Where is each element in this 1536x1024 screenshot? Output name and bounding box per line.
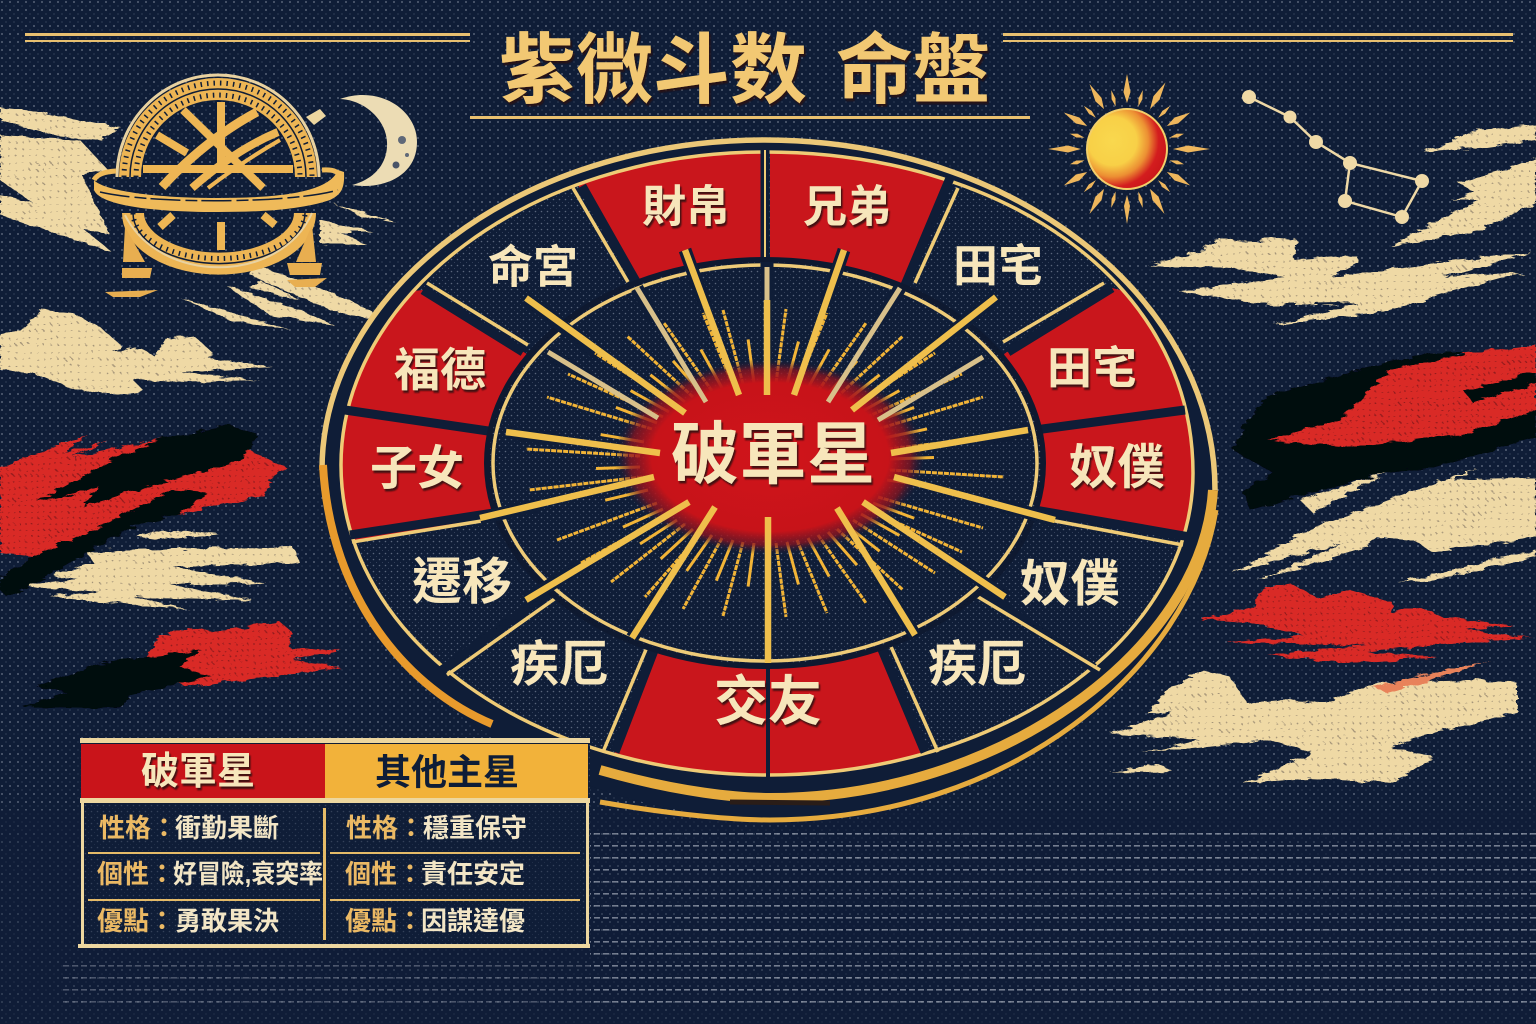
horizon ring <box>94 170 344 212</box>
label: 疾厄 right: 疾厄 <box>928 638 1026 692</box>
table header: 破軍星: 破軍星 <box>141 751 255 793</box>
palace: 兄弟 <box>770 154 944 283</box>
label: 遷移: 遷移 <box>412 554 512 610</box>
palace: 奴僕 <box>1040 414 1192 532</box>
label: 田宅 lower: 田宅 <box>1047 342 1137 394</box>
lower graduated arc <box>133 213 305 264</box>
palace: 福德 <box>350 290 526 426</box>
comparison table <box>78 738 590 948</box>
inner circle <box>489 262 1041 664</box>
wheel rim <box>323 465 1216 820</box>
cell dividers <box>345 148 1190 780</box>
right foot <box>287 225 327 287</box>
table rows: 破軍星 column: 衝勤果斷 <box>175 813 279 843</box>
wheel disc with outer ring <box>322 140 1215 818</box>
main burst rays <box>480 250 1055 663</box>
title: 紫微斗数 <box>499 28 807 114</box>
table rows: 其他主星 column: 責任安定 <box>421 859 525 889</box>
table rows: 其他主星 column: 個性： <box>345 859 423 889</box>
brush clouds: cream <box>0 108 1536 783</box>
upper graduated arc <box>130 89 306 177</box>
left foot <box>105 227 158 297</box>
table header: 破軍星 <box>81 744 325 798</box>
table rows: 破軍星 column: 勇敢果決 <box>175 906 279 936</box>
zodiac wheel <box>300 120 1216 820</box>
label: 奴僕 dark: 奴僕 <box>1020 556 1120 612</box>
title: 命盤 <box>836 28 990 114</box>
icon: big dipper constellation <box>1242 90 1429 224</box>
label: 破軍星 center: 破軍星 <box>671 417 875 493</box>
cell texture <box>341 152 1193 775</box>
table rows: 其他主星 column: 性格： <box>346 813 424 843</box>
label: 交友: 交友 <box>714 672 822 732</box>
table rows: 其他主星 column: 優點： <box>345 906 423 936</box>
cell outline <box>341 152 1193 775</box>
palace: 田宅 <box>1004 288 1183 425</box>
table rows: 其他主星 column <box>345 813 527 936</box>
table rows: 破軍星 column: 個性： <box>97 859 175 889</box>
label: 子女: 子女 <box>370 442 464 494</box>
label: 奴僕 red: 奴僕 <box>1069 442 1165 494</box>
table rows: 破軍星 column: 優點： <box>97 906 175 936</box>
red palaces <box>342 154 1192 774</box>
label: 田宅 upper: 田宅 <box>953 240 1043 292</box>
label: 兄弟: 兄弟 <box>803 182 891 232</box>
palace: 子女 <box>342 415 491 540</box>
icon: sun <box>1048 74 1210 224</box>
short burst rays <box>525 309 1005 617</box>
label: 疾厄 left: 疾厄 <box>510 638 608 692</box>
table rows: 破軍星 column: 好冒險,衰突率 <box>173 859 323 889</box>
central red glow <box>614 359 926 555</box>
label: 財帛: 財帛 <box>642 182 730 232</box>
icon: crescent moon <box>340 95 417 186</box>
brush strokes: red and black <box>0 345 1536 708</box>
palace: 財帛 <box>578 154 760 279</box>
table header: 其他主星 <box>325 744 588 798</box>
sphere spokes <box>143 102 293 250</box>
table header: 其他主星: 其他主星 <box>375 752 519 792</box>
table rows: 破軍星 column: 性格： <box>99 813 177 843</box>
icon: armillary sphere <box>94 75 344 297</box>
title <box>25 28 1513 119</box>
table rows: 其他主星 column: 穩重保守 <box>423 813 527 843</box>
label: 福德: 福德 <box>394 344 486 396</box>
table rows: 破軍星 column <box>97 813 323 936</box>
label: 命宮: 命宮 <box>488 242 578 292</box>
palace: 交友 <box>614 652 920 774</box>
ray halos <box>480 250 1055 638</box>
table rows: 其他主星 column: 因謀達優 <box>421 906 525 936</box>
